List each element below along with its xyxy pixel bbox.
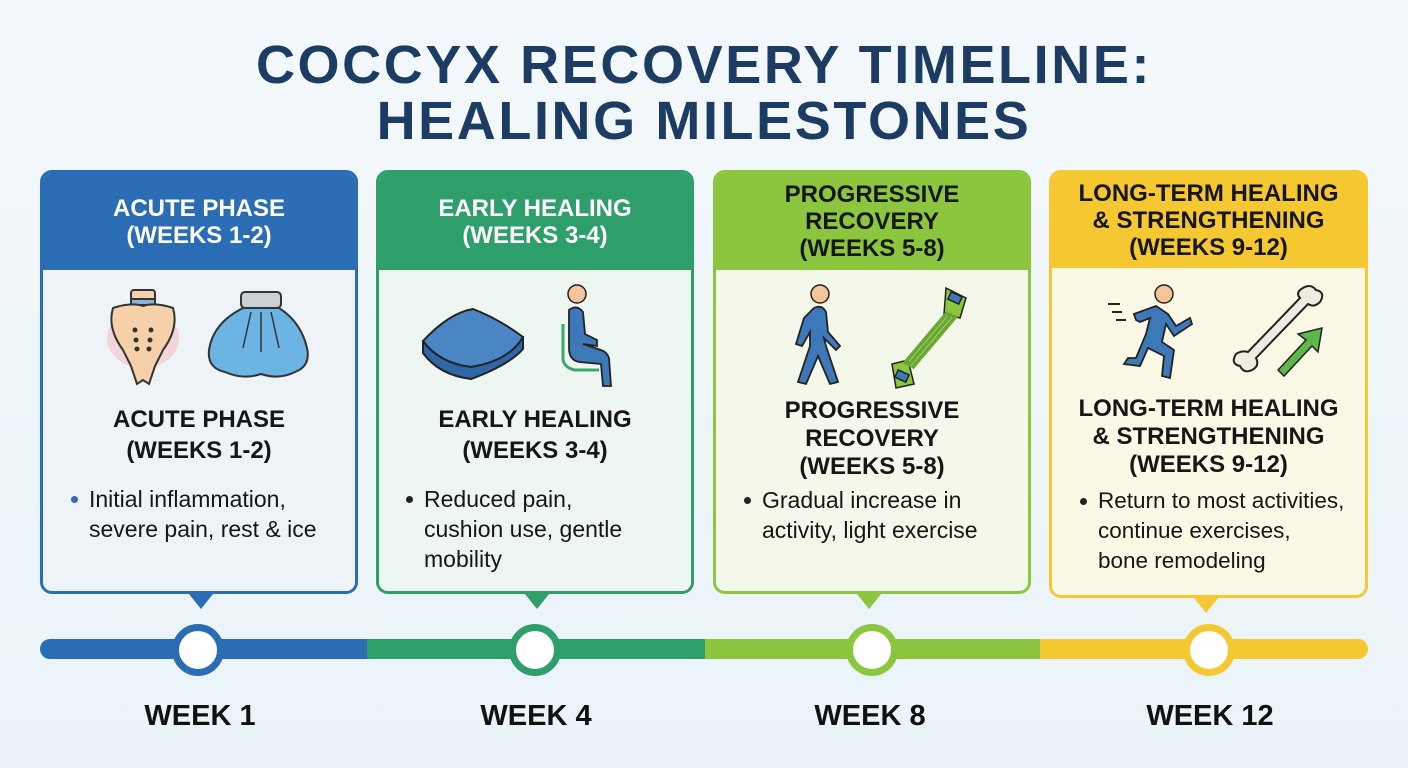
label: week 1: WEEK 1 bbox=[144, 700, 256, 732]
bullet text: Return to most activities, bbox=[1098, 488, 1344, 513]
pointer bbox=[525, 594, 549, 609]
body title bbox=[113, 406, 285, 464]
bullet text bbox=[406, 486, 622, 572]
body bbox=[1052, 268, 1365, 595]
icon: resistance band bbox=[891, 286, 967, 389]
header: acute phase: (WEEKS 1-2) bbox=[126, 222, 272, 248]
icon: coccyx bbox=[107, 289, 179, 386]
timeline bar bbox=[40, 639, 1368, 659]
marker: week 12 bbox=[1183, 624, 1235, 676]
header: acute phase bbox=[43, 173, 355, 270]
label: week 8: WEEK 8 bbox=[814, 700, 926, 732]
panel: progressive recovery bbox=[713, 170, 1031, 594]
pointer bbox=[189, 594, 213, 609]
pointer bbox=[1194, 598, 1218, 613]
bullet text: activity, light exercise bbox=[762, 517, 978, 543]
body title bbox=[438, 406, 632, 464]
body title: & STRENGTHENING bbox=[1092, 423, 1324, 450]
icon: walking person bbox=[794, 284, 842, 385]
bullet text: Initial inflammation, bbox=[89, 486, 286, 512]
header: progressive recovery: RECOVERY bbox=[805, 208, 939, 235]
panel: early healing bbox=[376, 170, 694, 594]
marker: week 4 bbox=[509, 624, 561, 676]
title: COCCYX RECOVERY TIMELINE: bbox=[256, 35, 1152, 95]
body title: (WEEKS 1-2) bbox=[126, 437, 272, 464]
label: week 12: WEEK 12 bbox=[1146, 700, 1274, 732]
header: long-term healing bbox=[1052, 173, 1365, 268]
header: early healing: EARLY HEALING bbox=[438, 194, 632, 222]
bullet text: bone remodeling bbox=[1098, 548, 1266, 573]
panel: acute phase bbox=[40, 170, 358, 594]
body bbox=[43, 270, 355, 591]
header: progressive recovery bbox=[716, 173, 1028, 270]
body title: LONG-TERM HEALING bbox=[1078, 395, 1338, 422]
title bbox=[256, 35, 1152, 151]
body title bbox=[785, 397, 959, 480]
body bbox=[379, 270, 691, 591]
header: long-term healing: (WEEKS 9-12) bbox=[1129, 234, 1288, 261]
header: progressive recovery: PROGRESSIVE bbox=[785, 181, 959, 208]
header: progressive recovery: (WEEKS 5-8) bbox=[799, 235, 945, 262]
body title: PROGRESSIVE bbox=[785, 397, 959, 424]
label: week 4: WEEK 4 bbox=[480, 700, 592, 732]
header: early healing: (WEEKS 3-4) bbox=[462, 222, 608, 248]
icon: cushion bbox=[422, 308, 524, 380]
header: acute phase: ACUTE PHASE bbox=[113, 194, 285, 222]
body title: (WEEKS 3-4) bbox=[462, 437, 608, 464]
body title: EARLY HEALING bbox=[438, 406, 632, 433]
body title bbox=[1078, 395, 1338, 478]
bullet text: cushion use, gentle bbox=[424, 516, 622, 542]
body title: (WEEKS 5-8) bbox=[799, 453, 945, 480]
bullet text: continue exercises, bbox=[1098, 518, 1291, 543]
icon: seated person bbox=[562, 284, 612, 387]
header: early healing bbox=[379, 173, 691, 270]
title: HEALING MILESTONES bbox=[377, 91, 1031, 151]
bullet text bbox=[744, 487, 978, 543]
bullet text: Gradual increase in bbox=[762, 487, 961, 513]
panel: long-term healing bbox=[1049, 170, 1368, 598]
marker: week 1 bbox=[172, 624, 224, 676]
icon: bone with arrow bbox=[1232, 285, 1324, 378]
body title: RECOVERY bbox=[805, 425, 939, 452]
header: long-term healing: & STRENGTHENING bbox=[1092, 207, 1324, 234]
body title: ACUTE PHASE bbox=[113, 406, 285, 433]
icon: ice pack bbox=[208, 291, 309, 378]
marker: week 8 bbox=[846, 624, 898, 676]
icon: running person bbox=[1108, 284, 1193, 379]
body bbox=[716, 270, 1028, 591]
bullet text bbox=[1080, 488, 1344, 573]
bullet text: Reduced pain, bbox=[424, 486, 572, 512]
bullet text bbox=[71, 486, 317, 542]
header: long-term healing: LONG-TERM HEALING bbox=[1078, 180, 1338, 207]
pointer bbox=[857, 594, 881, 609]
body title: (WEEKS 9-12) bbox=[1129, 451, 1288, 478]
bullet text: mobility bbox=[424, 546, 502, 572]
bullet text: severe pain, rest & ice bbox=[89, 516, 317, 542]
